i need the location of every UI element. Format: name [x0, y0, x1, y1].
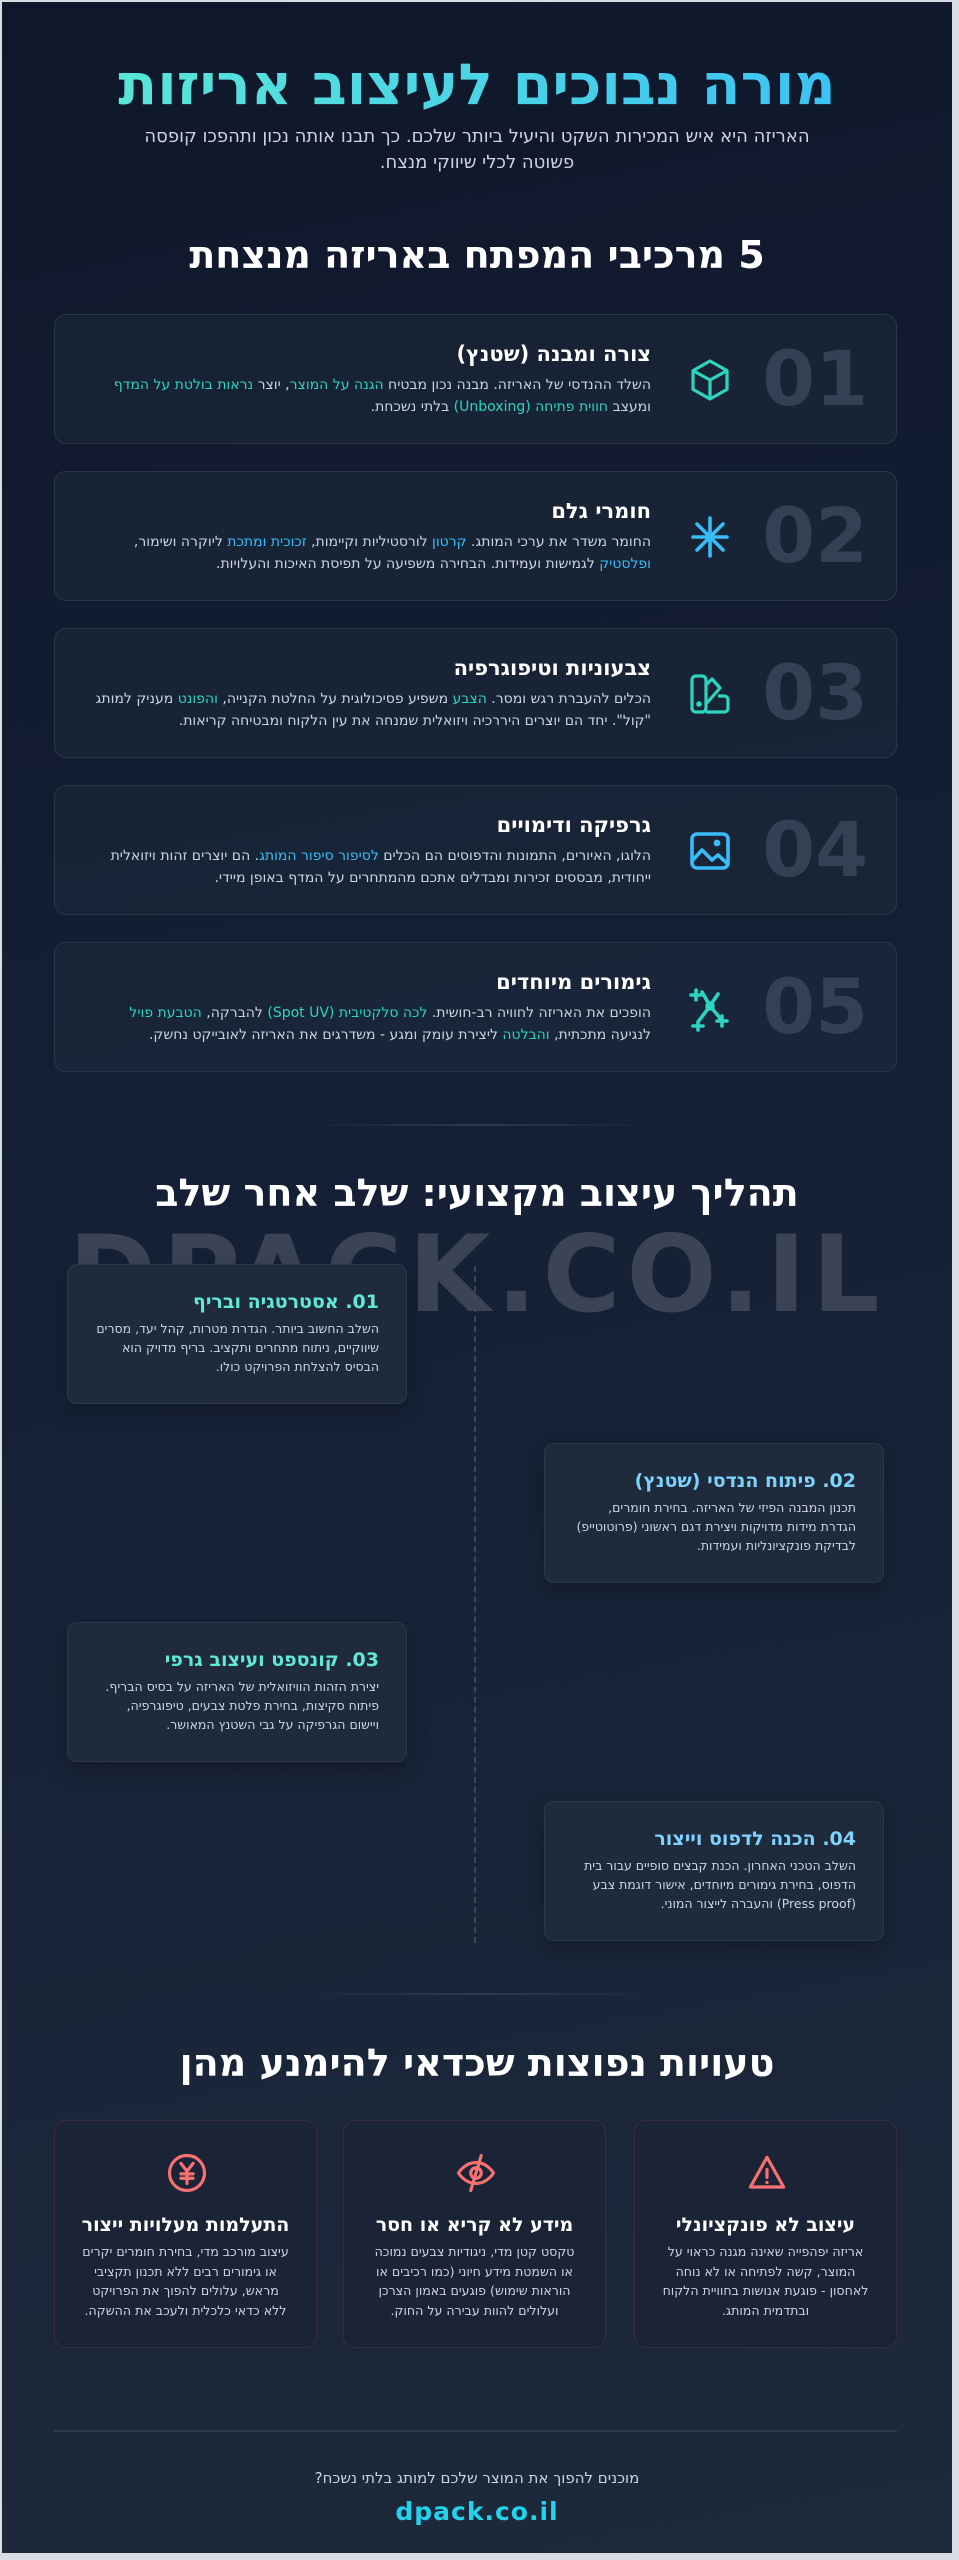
panel: mistake production costs [54, 2120, 317, 2348]
panel: element 02: החומר משדר את ערכי המותג. קרטון לורסטיליות וקיימות, זכוכית ומתכת ליוקרה ושימור, ופלסטיק לגמישות ועמידות. הבחירה משפיעה על תפיסת האיכות והעלויות. [134, 534, 651, 572]
icon: eye off [456, 2154, 496, 2192]
panel: mistake unreadable info: מידע לא קריא או חסר [376, 2214, 573, 2236]
icon: warning [748, 2156, 786, 2189]
panel: mistake unreadable info: טקסט קטן מדי, ניגודיות צבעים נמוכה [375, 2244, 574, 2259]
panel: element 02 [54, 471, 897, 601]
step 02: תכנון המבנה הפיזי של האריזה. בחירת חומרים, הגדרת מידות מדויקות ויצירת דגם ראשוני (פרוטוטייפ) לבדיקת פונקציונליות ועמידות. [577, 1500, 856, 1553]
panel: element 04: הלוגו, האיורים, התמונות והדפוסים הם הכלים לסיפור סיפור המותג. הם יוצרים זהות ויזואלית ייחודית, מבססים זכירות ומבדלים אתכם מהמתחרים על המדף באופן מיידי. [111, 848, 651, 886]
panel: mistake non-functional: לאחסון - פוגעת אנושות בחוויית הלקוח [663, 2283, 868, 2298]
step 03: 03. קונספט ועיצוב גרפי [165, 1649, 379, 1671]
step 02: 02. פיתוח הנדסי (שטנץ) [635, 1470, 856, 1492]
panel: element 04 [54, 785, 897, 915]
heading: mistakes: טעויות נפוצות שכדאי להימנע מהן [180, 2041, 774, 2085]
step 03: ויישום הגרפיקה על גבי השטנץ המאושר. [166, 1717, 379, 1732]
panel: mistake production costs: או גימורים רבים ללא תכנון תקציבי [94, 2264, 277, 2278]
panel: mistake non-functional: המוצר, קשה לפתיחה או לא נוחה [676, 2264, 855, 2278]
icon: asterisk [691, 516, 729, 558]
step 02 [544, 1443, 884, 1583]
panel: mistake unreadable info: או השמטת מידע חיוני (כמו רכיבים או [376, 2264, 573, 2278]
icon: yen coin [168, 2154, 206, 2192]
panel: mistake non-functional: ובתדמית המותג. [722, 2302, 809, 2318]
panel: mistake non-functional: עיצוב לא פונקציונלי [676, 2214, 855, 2236]
panel: element 04: 04 [762, 805, 868, 894]
panel: mistake unreadable info: ועלולים להוות עבירה על החוק. [391, 2302, 558, 2318]
step 01: 01. אסטרטגיה ובריף [193, 1291, 379, 1313]
icon: cube [691, 359, 729, 401]
step 04: 04. הכנה לדפוס וייצור [654, 1828, 856, 1850]
footer question: מוכנים להפוך את המוצר שלכם למותג בלתי נשכח? [315, 2469, 639, 2487]
panel: element 01 [54, 314, 897, 444]
panel: mistake non-functional: אריזה יפהפייה שאינה מגנה כראוי על [668, 2244, 863, 2259]
heading: 5 key elements: 5 מרכיבי המפתח באריזה מנצחת [189, 233, 765, 277]
step 04: השלב הטכני האחרון. הכנת קבצים סופיים עבור בית הדפוס, בחירת גימורים מיוחדים, אישור דוגמת צבע (Press proof) והעברה לייצור המוני. [584, 1858, 856, 1911]
panel: element 04: גרפיקה ודימויים [497, 813, 651, 837]
panel: mistake unreadable info [343, 2120, 606, 2348]
panel: element 02: חומרי גלם [551, 499, 651, 523]
panel: mistake production costs: התעלמות מעלויות ייצור [82, 2214, 289, 2236]
step 01: השלב החשוב ביותר. הגדרת מטרות, קהל יעד, מסרים שיווקיים, ניתוח מתחרים ותקציב. בריף מדויק הוא הבסיס להצלחת הפרויקט כולו. [96, 1321, 379, 1374]
icon: swatch [690, 674, 730, 714]
panel: element 05: 05 [762, 962, 868, 1051]
title: מורה נבוכים לעיצוב אריזות [118, 52, 836, 118]
panel: element 03: הכלים להעברת רגש ומסר. הצבע משפיע פסיכולוגית על החלטת הקנייה, והפונט מעניק למותג "קול". יחד הם יוצרים היררכיה ויזואלית שמנחה את עין הלקוח ומבטיחה קריאות. [96, 691, 651, 729]
subtitle: האריזה היא איש המכירות השקט והיעיל ביותר שלכם. כך תבנו אותה נכון ותהפכו קופסה פשוטה לכלי שיווקי מנצח. [144, 126, 810, 173]
heading: process: תהליך עיצוב מקצועי: שלב אחר שלב [155, 1171, 799, 1215]
footer link: dpack.co.il [395, 2497, 559, 2526]
panel: element 05 [54, 942, 897, 1072]
step 04 [544, 1801, 884, 1941]
step 03: יצירת הזהות הוויזואלית של האריזה על בסיס הבריף. פיתוח סקיצות, בחירת פלטת צבעים, טיפוגרפיה, [105, 1679, 379, 1713]
panel: mistake production costs: עיצוב מורכב מדי, בחירת חומרים יקרים [82, 2244, 289, 2259]
timeline line [474, 1266, 476, 1943]
panel: element 03: 03 [762, 648, 868, 737]
panel: element 05: הופכים את האריזה לחוויה רב-חושית. לכה סלקטיבית (Spot UV) להברקה, הטבעת פויל לנגיעה מתכתית, והבלטה ליצירת עומק ומגע - משדרגים את האריזה לאובייקט נחשק. [129, 1005, 651, 1043]
panel: element 05: גימורים מיוחדים [496, 970, 651, 994]
panel: element 02: 02 [762, 491, 868, 580]
panel: element 01: השלד ההנדסי של האריזה. מבנה נכון מבטיח הגנה על המוצר, יוצר נראות בולטת על המדף ומעצב חווית פתיחה (Unboxing) בלתי נשכחת. [114, 377, 651, 415]
step 01 [67, 1264, 407, 1404]
panel: mistake production costs: ללא כדאי כלכלית ולעכב את ההשקה. [85, 2302, 286, 2318]
panel: mistake non-functional [634, 2120, 897, 2348]
panel: element 03 [54, 628, 897, 758]
panel: element 01: צורה ומבנה (שטנץ) [456, 342, 651, 366]
panel: element 01: 01 [762, 334, 868, 423]
icon: sparkles [689, 988, 729, 1032]
panel: element 03: צבעוניות וטיפוגרפיה [454, 656, 651, 680]
watermark: DPACK.CO.IL [68, 1213, 886, 1336]
step 03 [67, 1622, 407, 1762]
icon: image [690, 832, 730, 870]
panel: mistake production costs: מראש, עלולים להפוך את הפרויקט [92, 2283, 279, 2298]
panel: mistake unreadable info: הוראות שימוש) פוגעים באמון הצרכן [378, 2283, 571, 2298]
